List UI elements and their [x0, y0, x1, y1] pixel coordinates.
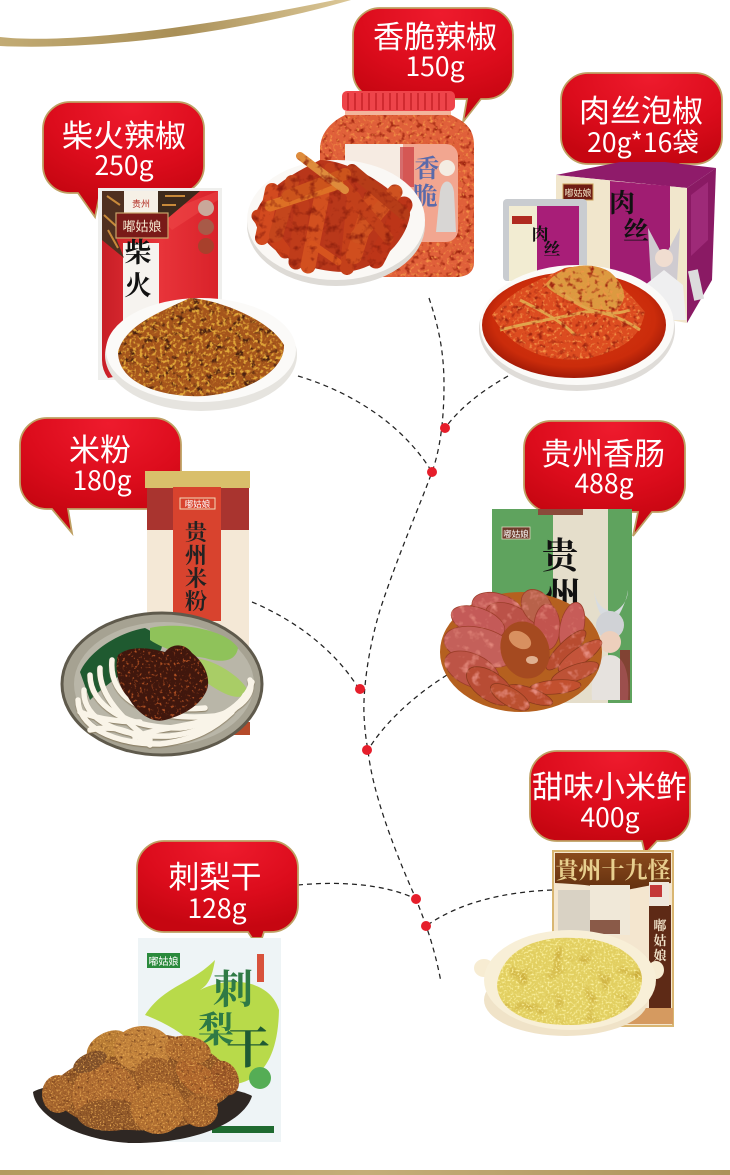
sausage package: 州 — [545, 568, 581, 619]
jar label: 香 — [414, 149, 440, 185]
product: 肉丝泡椒 box, sachet and bowl — [479, 162, 716, 391]
gift box: 丝 — [623, 211, 649, 248]
rose pear package: 干 — [226, 1012, 270, 1076]
white plate — [247, 160, 425, 286]
callout: 贵州香肠 488g: 488g — [574, 462, 634, 501]
braised meat topping — [116, 645, 208, 721]
callout: 甜味小米鲊 400g: 400g — [580, 796, 640, 835]
white bowl — [105, 298, 297, 411]
millet package: 貴州十九怪 — [556, 852, 670, 885]
dark plate — [33, 1081, 252, 1143]
sausage package: 贵 — [542, 528, 583, 579]
package bag: 火 — [124, 264, 152, 303]
callout: 肉丝泡椒 20g*16袋 — [561, 73, 722, 172]
rice noodle package: 州 — [185, 539, 207, 570]
rice noodle package: 粉 — [185, 585, 207, 616]
ceramic bowl — [62, 613, 262, 755]
sausage package — [492, 509, 632, 703]
jar body — [320, 115, 474, 277]
red connector nodes — [355, 423, 450, 931]
callout: 刺梨干 128g: 刺梨干 — [168, 852, 262, 897]
product: 米粉 package and noodle bowl — [62, 471, 262, 755]
rice noodle package: 嘟姑娘 — [185, 498, 211, 510]
package bag: 嘟姑娘 — [122, 216, 162, 235]
rose pear package: 梨 — [198, 1002, 234, 1053]
gift box — [556, 162, 716, 323]
package bag: 柴 — [124, 231, 152, 270]
callout: 香脆辣椒 150g — [353, 8, 513, 122]
callout: 柴火辣椒 250g: 柴火辣椒 — [62, 111, 186, 156]
dashed branching tree connector — [252, 298, 552, 982]
package bag — [98, 188, 222, 380]
sweet millet — [497, 938, 642, 1025]
callout: 刺梨干 128g: 128g — [187, 887, 247, 926]
product: 甜味小米鲊 package and bowl — [474, 851, 673, 1036]
dried rose pear pieces — [42, 1024, 244, 1134]
rice noodles — [78, 660, 252, 745]
jar label: 脆 — [412, 177, 438, 213]
millet package — [553, 851, 673, 1026]
sachet: 丝 — [544, 235, 560, 260]
rose pear package — [138, 938, 281, 1142]
shredded pork and pepper — [492, 266, 645, 360]
gift box: 肉 — [609, 183, 635, 220]
product: 香脆辣椒 jar and plate — [247, 91, 474, 286]
product: 刺梨干 package and plate — [33, 938, 281, 1143]
rose pear package: 嘟姑娘 — [148, 953, 178, 968]
sachet: 肉 — [532, 220, 548, 245]
callout: 肉丝泡椒 20g*16袋: 肉丝泡椒 — [579, 86, 703, 131]
product: 柴火辣椒 bag and bowl — [98, 188, 297, 411]
cream bowl — [474, 930, 664, 1036]
callout: 柴火辣椒 250g: 250g — [94, 144, 154, 183]
rice noodle package: 贵 — [185, 516, 210, 547]
callout: 米粉 180g — [20, 418, 181, 533]
callout: 甜味小米鲊 400g: 甜味小米鲊 — [532, 762, 687, 807]
red oil sauce — [482, 272, 666, 378]
callout: 香脆辣椒 150g: 香脆辣椒 — [373, 12, 497, 57]
callout: 贵州香肠 488g — [524, 421, 685, 536]
callout: 肉丝泡椒 20g*16袋: 20g*16袋 — [587, 121, 699, 160]
bok choy — [80, 626, 248, 700]
millet package: 姑 — [653, 930, 667, 949]
white bowl — [479, 265, 675, 391]
rice noodle package — [145, 471, 250, 735]
millet package: 嘟 — [653, 915, 667, 934]
callout: 贵州香肠 488g: 贵州香肠 — [541, 429, 665, 474]
sausage slices — [439, 583, 606, 716]
rice noodle package: 米 — [185, 562, 207, 593]
callout: 香脆辣椒 150g: 150g — [405, 45, 465, 84]
package bag: 贵州 — [132, 197, 150, 210]
bottom gold bar — [0, 1170, 730, 1175]
jar lid — [342, 91, 455, 116]
brown plate — [440, 592, 602, 712]
rose pear package: 刺 — [213, 958, 253, 1015]
gold swoosh at top — [0, 0, 351, 47]
millet package: 娘 — [653, 945, 667, 964]
gift box: 嘟姑娘 — [564, 186, 592, 199]
jar label — [345, 144, 458, 242]
sachet — [503, 199, 587, 281]
callout: 甜味小米鲊 400g — [530, 751, 690, 854]
sausage package: 嘟姑娘 — [503, 528, 529, 540]
callout: 柴火辣椒 250g — [43, 102, 204, 217]
callout: 米粉 180g: 米粉 — [69, 425, 131, 470]
product: 贵州香肠 package and plate — [439, 509, 632, 716]
callout: 刺梨干 128g — [137, 841, 298, 938]
callout: 米粉 180g: 180g — [72, 459, 132, 498]
whole sausage — [493, 615, 557, 685]
crispy chili pieces — [254, 156, 410, 272]
chili flakes — [118, 298, 284, 396]
